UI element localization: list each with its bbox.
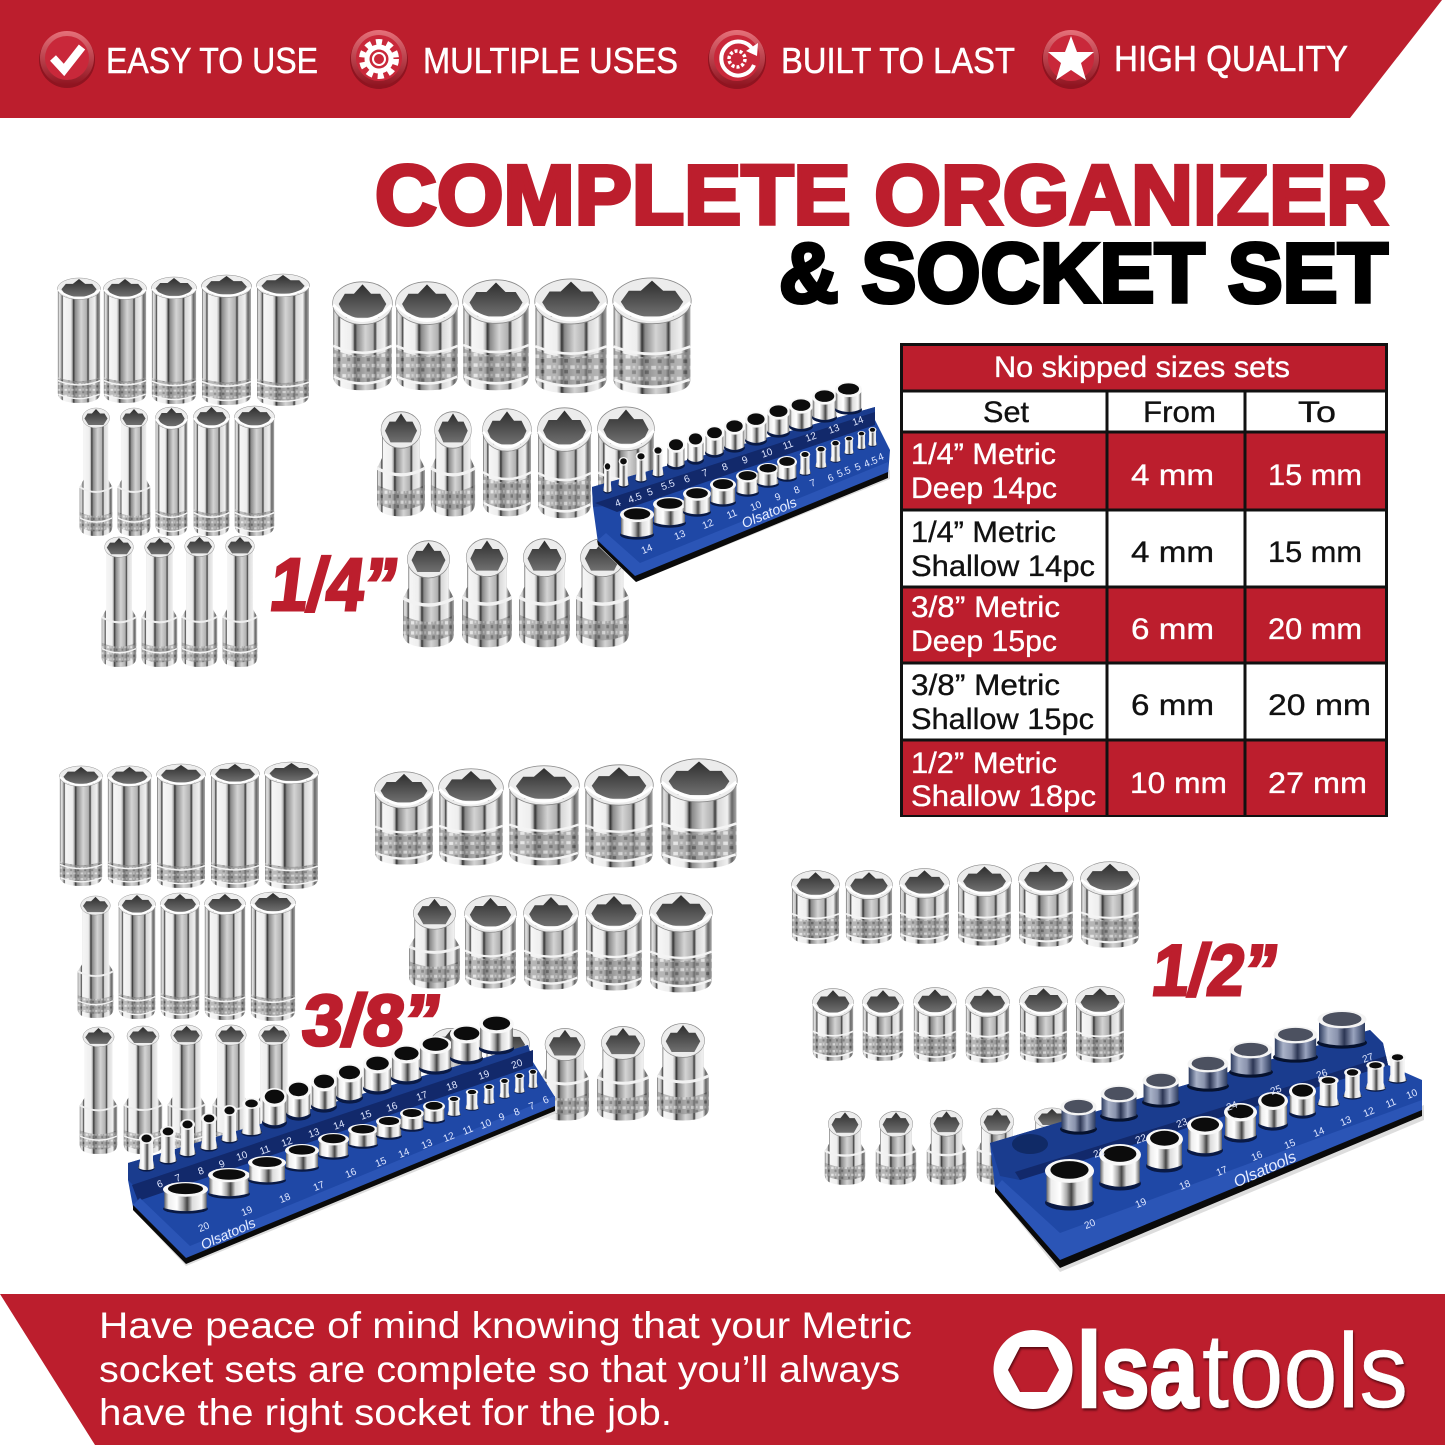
tray size labels: 14 [640, 542, 655, 557]
tray size labels: 10 [749, 499, 764, 514]
label: 1/4 inch: 1/4” [266, 543, 403, 626]
tray sockets [603, 382, 877, 540]
tray size labels: 14 [332, 1118, 347, 1133]
logo: Olsatools [994, 1312, 1408, 1430]
tray size labels: 10 [760, 446, 775, 461]
tray size labels: 7 [808, 477, 818, 490]
tray size labels: 11 [781, 439, 795, 453]
tray size labels [1083, 1051, 1420, 1232]
tray size labels: 7 [701, 467, 710, 480]
tray size labels: 16 [1250, 1149, 1265, 1164]
icon: star [1042, 30, 1100, 89]
tray size labels: 16 [344, 1166, 359, 1181]
tray size labels: 9 [497, 1111, 507, 1124]
icon: check mark [39, 31, 95, 88]
logo: Olsatools: tools [1202, 1312, 1408, 1430]
tray size labels: 4.5 [863, 455, 880, 470]
closing statement: socket sets are complete so that you’ll always [99, 1349, 900, 1390]
tray size labels: 17 [312, 1179, 327, 1194]
tray size labels: 12 [701, 517, 716, 532]
panel: 1/4 inch organizer tray [592, 382, 890, 582]
tray sockets [138, 1015, 538, 1214]
tray size labels: 4 [614, 497, 623, 510]
tray size labels [614, 414, 886, 557]
title: & SOCKET SET [779, 226, 1388, 320]
tray size labels: 20 [1083, 1217, 1098, 1232]
tray size labels: 19 [240, 1204, 255, 1219]
title: COMPLETE ORGANIZER [375, 148, 1388, 242]
tray size labels: 20 [197, 1220, 212, 1235]
tray brand: Olsatools [1231, 1149, 1299, 1191]
tray size labels: 13 [673, 528, 688, 543]
tray size labels: 9 [741, 454, 750, 467]
tray size labels: 14 [1312, 1125, 1327, 1140]
tray size labels: 19 [477, 1068, 492, 1083]
tray size labels: 18 [1178, 1178, 1193, 1193]
tray size labels: 8 [512, 1106, 522, 1119]
tray size labels: 17 [415, 1089, 430, 1104]
tray size labels: 26 [1315, 1067, 1330, 1082]
tray size labels: 27 [1361, 1051, 1376, 1066]
table: no skipped sizes sets: 4 mm [1131, 536, 1214, 569]
tray size labels: 22 [1134, 1132, 1149, 1147]
title [375, 148, 1388, 320]
table: no skipped sizes sets: Shallow 15pc [911, 703, 1094, 736]
table: no skipped sizes sets: From [1143, 396, 1216, 429]
table: no skipped sizes sets: 10 mm [1130, 767, 1227, 800]
table: no skipped sizes sets: Deep 14pc [911, 472, 1057, 505]
tray size labels: 6 [156, 1178, 165, 1191]
tray sockets [1045, 1010, 1407, 1210]
table: no skipped sizes sets: 1/4” Metric [911, 438, 1056, 471]
logo: Olsatools: lsa [1077, 1312, 1199, 1430]
table: no skipped sizes sets: 15 mm [1268, 536, 1362, 569]
tray size labels: 24 [1225, 1099, 1240, 1114]
tray size labels: 11 [461, 1123, 475, 1138]
table: no skipped sizes sets: Deep 15pc [911, 625, 1057, 658]
closing statement: Have peace of mind knowing that your Metric [99, 1305, 912, 1346]
tray size labels: 8 [721, 461, 730, 474]
tray size labels: 7 [527, 1100, 537, 1113]
tray size labels: 10 [1405, 1087, 1420, 1102]
table: no skipped sizes sets: 4 mm [1131, 459, 1214, 492]
tray size labels: 11 [1384, 1096, 1398, 1111]
tray size labels: 5 [646, 486, 655, 499]
tray size labels: 17 [1215, 1164, 1230, 1179]
top banner [0, 0, 1442, 118]
tray size labels [156, 1057, 551, 1235]
tray size labels: 6 [541, 1094, 551, 1107]
tray size labels: 15 [374, 1155, 389, 1170]
tray brand: Olsatools [739, 494, 799, 531]
tray size labels: 18 [278, 1191, 293, 1206]
tray size labels: 8 [792, 484, 802, 497]
table: no skipped sizes sets: 1/4” Metric [911, 516, 1056, 549]
tray size labels: 10 [479, 1117, 494, 1132]
tray size labels: 19 [1134, 1196, 1149, 1211]
closing statement: have the right socket for the job. [99, 1392, 672, 1433]
panel: 1/4 inch deep sockets [57, 274, 309, 667]
tray size labels: 5.5 [660, 478, 677, 493]
tray size labels: 5.5 [836, 465, 853, 480]
tray size labels: 20 [510, 1057, 525, 1072]
closing statement [99, 1305, 912, 1433]
table: no skipped sizes sets: 1/2” Metric [911, 747, 1057, 780]
tray size labels: 5 [853, 461, 863, 474]
tray size labels: 12 [804, 430, 819, 445]
tray size labels: 13 [420, 1137, 435, 1152]
tray size labels: 4.5 [627, 491, 644, 506]
tray size labels: 10 [235, 1149, 250, 1164]
table: no skipped sizes sets: 6 mm [1131, 689, 1214, 722]
tray size labels: 9 [218, 1158, 227, 1171]
tray size labels: 9 [773, 491, 783, 504]
table: no skipped sizes sets: Shallow 18pc [911, 780, 1096, 813]
tray size labels: 12 [442, 1130, 457, 1145]
tray size labels: 23 [1175, 1116, 1190, 1131]
panel: 3/8 inch shallow sockets [375, 759, 737, 1121]
icon: circular arrow [708, 30, 766, 89]
table: no skipped sizes sets: No skipped sizes sets [994, 351, 1290, 384]
tray size labels: 13 [1339, 1114, 1354, 1129]
tray size labels: 21 [1092, 1146, 1107, 1161]
table: no skipped sizes sets: Shallow 14pc [911, 550, 1095, 583]
panel: 1/4 inch shallow sockets [333, 278, 691, 647]
table: no skipped sizes sets: 15 mm [1268, 459, 1362, 492]
label: high quality: HIGH QUALITY [1114, 38, 1348, 79]
magnet hole [1012, 1134, 1048, 1154]
tray size labels: 18 [445, 1079, 460, 1094]
panel: 1/2 inch organizer tray [990, 1010, 1424, 1272]
label: built to last: BUILT TO LAST [781, 40, 1015, 81]
table: no skipped sizes sets: 20 mm [1268, 613, 1362, 646]
table: no skipped sizes sets: 3/8” Metric [911, 669, 1060, 702]
label: multiple uses: MULTIPLE USES [423, 40, 678, 81]
table: no skipped sizes sets: Set [983, 396, 1030, 429]
panel: 1/2 inch sockets [791, 862, 1139, 1185]
tray size labels: 11 [725, 507, 739, 522]
tray size labels: 4 [876, 451, 886, 464]
tray size labels: 16 [385, 1100, 400, 1115]
tray size labels: 15 [359, 1108, 374, 1123]
table: no skipped sizes sets [900, 344, 1388, 817]
tray size labels: 14 [851, 414, 866, 429]
bottom banner [0, 1294, 1445, 1445]
table: no skipped sizes sets: 3/8” Metric [911, 591, 1060, 624]
tray size labels: 6 [826, 472, 836, 485]
tray size labels: 15 [1283, 1137, 1298, 1152]
table: no skipped sizes sets: 27 mm [1268, 767, 1367, 800]
tray size labels: 11 [258, 1144, 272, 1158]
tray size labels: 13 [827, 422, 842, 437]
tray size labels: 14 [397, 1146, 412, 1161]
tray size labels: 13 [307, 1126, 322, 1141]
tray brand: Olsatools [198, 1214, 258, 1253]
table: no skipped sizes sets: 6 mm [1131, 613, 1214, 646]
tray size labels: 25 [1269, 1083, 1284, 1098]
tray size labels: 12 [280, 1135, 295, 1150]
label: easy to use: EASY TO USE [106, 40, 318, 81]
panel: 3/8 inch deep sockets [59, 762, 318, 1154]
tray size labels: 7 [174, 1172, 183, 1185]
tray size labels: 8 [197, 1165, 206, 1178]
label: 1/2 inch: 1/2” [1148, 931, 1283, 1011]
panel: 3/8 inch organizer tray [128, 1015, 557, 1266]
table: no skipped sizes sets: 20 mm [1268, 689, 1371, 722]
table: no skipped sizes sets: To [1298, 396, 1336, 429]
tray size labels: 6 [683, 473, 692, 486]
icon: gear [350, 30, 408, 89]
tray size labels: 12 [1362, 1105, 1377, 1120]
label: 3/8 inch: 3/8” [298, 981, 446, 1061]
